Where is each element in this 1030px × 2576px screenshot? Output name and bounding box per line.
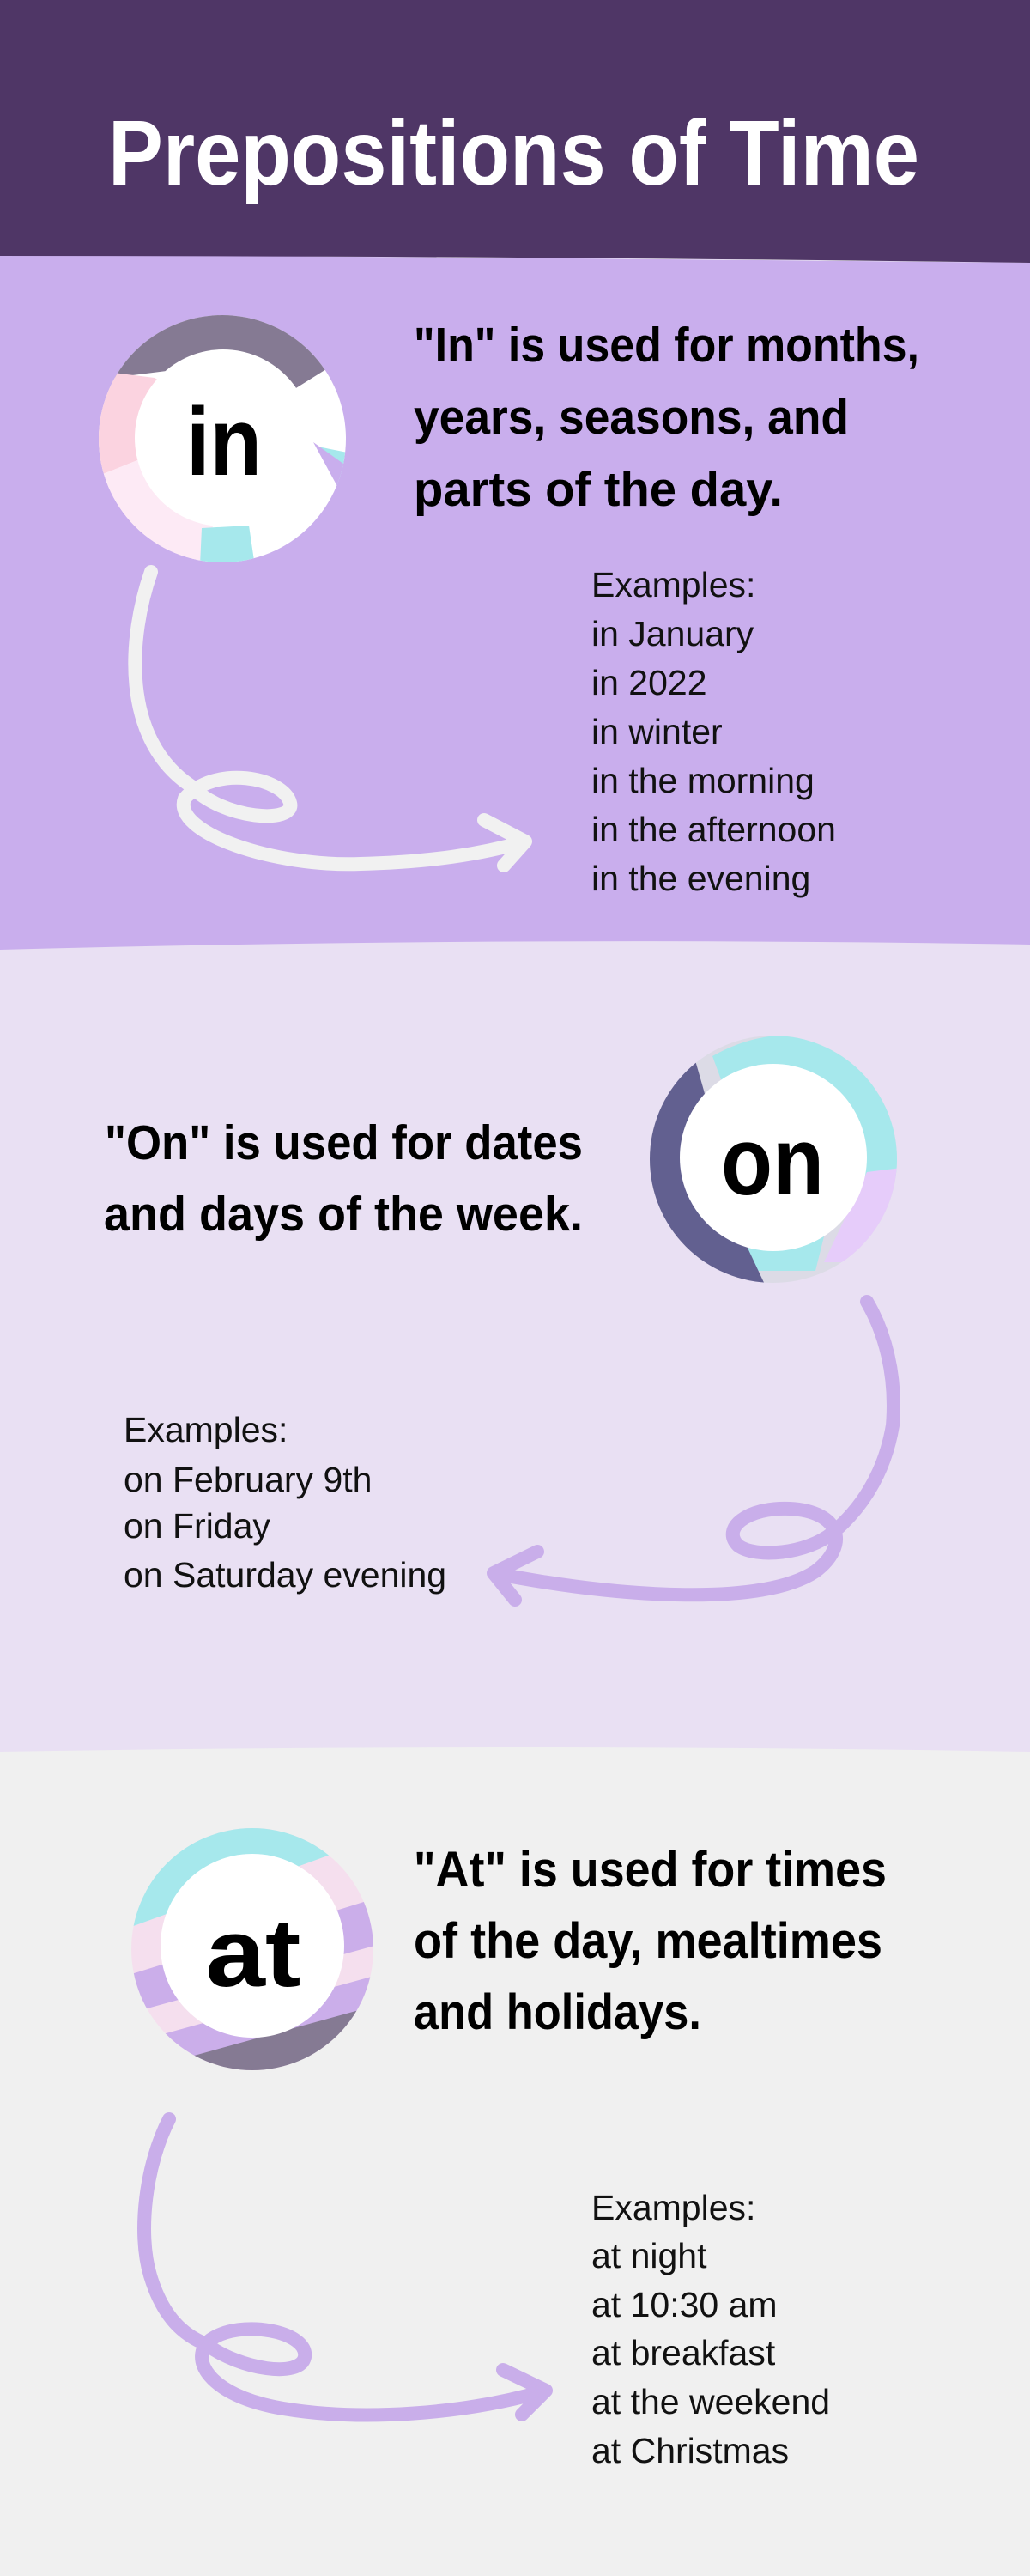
heading: in [414, 318, 919, 517]
heading: at: of the day, mealtimes [414, 1913, 882, 1969]
examples: in: Examples: [591, 565, 755, 605]
icon: at circle [131, 1828, 373, 2070]
icon: on circle [644, 1030, 901, 1288]
examples: in: in 2022 [591, 663, 707, 702]
examples: in: in January [591, 614, 754, 653]
examples: on [124, 1410, 446, 1595]
heading: in: parts of the day. [414, 462, 783, 517]
examples: in [591, 565, 836, 898]
arrow: at [144, 2119, 546, 2415]
examples: at: at 10:30 am [591, 2285, 778, 2324]
examples: in: in winter [591, 712, 723, 751]
heading: at [414, 1842, 887, 2040]
panel: on [104, 1030, 901, 1600]
examples: in: in the morning [591, 761, 815, 800]
examples: at: at breakfast [591, 2333, 776, 2372]
examples: on: Examples: [124, 1410, 288, 1449]
examples: in: in the afternoon [591, 810, 836, 849]
icon: in circle [99, 315, 346, 562]
heading: at: and holidays. [414, 1984, 701, 2040]
examples: at [591, 2188, 830, 2470]
title: Prepositions of Time [108, 100, 919, 204]
heading: at: "At" is used for times [414, 1842, 887, 1898]
icon: in circle: in [186, 388, 262, 495]
panel: at [129, 1825, 887, 2470]
examples: on: on Friday [124, 1506, 270, 1546]
examples: at: Examples: [591, 2188, 755, 2227]
arrow: in [135, 572, 525, 866]
examples: at: at the weekend [591, 2382, 830, 2421]
heading: in: years, seasons, and [414, 390, 849, 445]
examples: on: on February 9th [124, 1460, 372, 1499]
heading: in: "In" is used for months, [414, 318, 919, 373]
heading: on: and days of the week. [104, 1187, 583, 1242]
examples: in: in the evening [591, 859, 810, 898]
heading: on: "On" is used for dates [105, 1115, 583, 1170]
arrow: on [494, 1302, 894, 1600]
icon: at circle: at [206, 1899, 300, 2007]
panel: in [86, 309, 919, 898]
examples: at: at night [591, 2236, 707, 2275]
heading: on [104, 1115, 583, 1242]
examples: on: on Saturday evening [124, 1555, 446, 1595]
examples: at: at Christmas [591, 2431, 789, 2470]
icon: on circle: on [721, 1108, 824, 1215]
